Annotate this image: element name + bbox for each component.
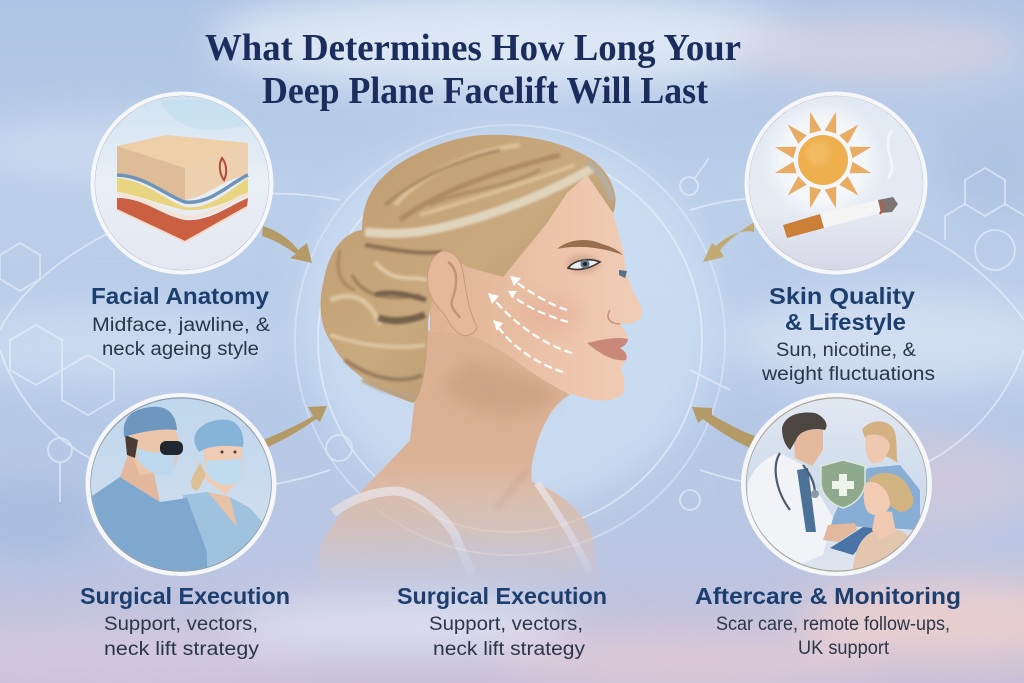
central illustration: woman in profile [318,135,642,600]
description: Sun, nicotine, & [776,340,916,361]
hair strands [330,145,612,396]
panel: skin quality [745,90,935,385]
icon: skin layers [90,90,274,276]
camisole straps [333,491,472,575]
arrow: top left [262,226,312,263]
heading [769,283,915,335]
heading: Facial Anatomy [91,283,269,309]
description: Support, vectors, [104,614,258,635]
lips [587,338,628,360]
title [205,27,741,112]
heading: Skin Quality [769,283,915,309]
heading: Aftercare & Monitoring [695,583,961,609]
shield [821,460,865,508]
panel: facial anatomy [90,90,274,360]
description [92,315,270,360]
heading: Surgical Execution [80,583,290,609]
icon: sun and cigarette [745,90,929,276]
ear [428,251,477,336]
title: What Determines How Long Your [205,27,741,69]
arrow: bottom right [692,407,755,448]
arrow: bottom left [263,406,327,448]
description [761,340,935,385]
decorative rings and molecules [0,125,1024,555]
description [429,614,586,660]
doctor [748,454,833,564]
cheek blush [518,295,582,335]
description: UK support [798,638,890,659]
heading: Surgical Execution [397,583,607,609]
title: Deep Plane Facelift Will Last [262,70,708,112]
icon: doctor and patient [742,392,930,580]
hair [320,135,616,403]
face [430,172,642,401]
arrow: top right [703,222,754,262]
eye [557,240,627,278]
description: Midface, jawline, & [92,315,270,336]
description: neck lift strategy [104,639,260,660]
panel: surgical execution centre [397,583,607,660]
nurse [830,465,920,530]
clipboard and hand [830,527,877,555]
description: Scar care, remote follow-ups, [716,614,950,635]
description: weight fluctuations [761,364,935,385]
nose wing [608,310,620,324]
description: neck ageing style [102,339,259,360]
icon: surgeons [86,392,275,580]
patient [853,530,908,569]
description [716,614,950,659]
lift arrows [492,280,572,372]
description [104,614,260,660]
neck shading [449,365,560,414]
panel: aftercare [695,392,961,659]
ear detail [448,262,460,318]
shoulders and chest [318,330,598,573]
description: Support, vectors, [429,614,583,635]
description: neck lift strategy [433,639,586,660]
panel: surgical execution left [80,392,290,660]
heading: & Lifestyle [785,309,906,335]
